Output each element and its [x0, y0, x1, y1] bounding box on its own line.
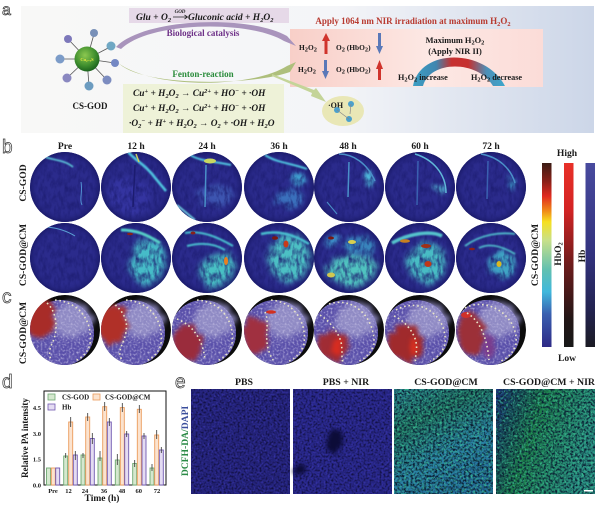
panel: H2O2 response box: [290, 29, 543, 87]
glucose formula box: 2: [259, 17, 264, 24]
Fenton equations box: 2: [217, 123, 222, 130]
Fenton equations box: −: [235, 103, 239, 110]
panel: H2O2 response box: 2: [365, 46, 368, 54]
image 24 h: [172, 223, 242, 293]
panel: H2O2 response box: ): [368, 43, 371, 52]
panel label d: d: [2, 372, 13, 393]
fluorescence headers: PBS + NIR: [323, 377, 370, 388]
panel: H2O2 response box: 2: [342, 46, 345, 54]
image Pre: [30, 152, 100, 222]
colour bars legend: [530, 148, 595, 364]
panel: H2O2 response box: 2: [477, 76, 481, 84]
image 12 h: [101, 152, 171, 222]
NIR heading: Apply 1064 nm NIR irradiation at maximum H: [315, 16, 497, 26]
panel: H2O2 response box: 2: [487, 76, 490, 84]
image 48 h: [312, 295, 384, 366]
panel: H2O2 response box: 2: [365, 68, 368, 76]
fluorescence headers: CS-GOD@CM: [414, 377, 478, 388]
panel: H2O2 response box: increase: [417, 73, 448, 82]
time headers: 24 h: [198, 141, 216, 152]
Fenton equations box: + HO: [211, 89, 235, 99]
image 36 h: [242, 295, 314, 366]
CS-GOD@CM bars: [51, 407, 159, 485]
error bars: [66, 402, 161, 471]
icon: hydroxyl radical: [322, 96, 364, 126]
Fenton equations box: O: [187, 119, 194, 129]
panel: H2O2 response box: 2: [404, 76, 408, 84]
Fenton equations box: 2: [174, 108, 179, 115]
y axis title: Relative PA intensity: [20, 398, 30, 478]
panel label a: a: [2, 2, 11, 19]
Fenton equations box: + H: [166, 119, 184, 129]
bar chart: relative PA intensity: 36: [101, 488, 108, 495]
image 36 h: [244, 223, 317, 293]
panel: H2O2 response box: O: [336, 65, 342, 74]
bar chart: relative PA intensity: 48: [119, 488, 126, 495]
panel: H2O2 response box: 2: [342, 68, 345, 76]
fluorescence headers: PBS: [235, 377, 254, 388]
image 24 h: [170, 295, 242, 366]
bar chart: relative PA intensity: 0.0: [33, 482, 41, 490]
panel: H2O2 response box: O: [475, 36, 482, 45]
colour bars legend: Low: [558, 353, 576, 364]
bar chart: relative PA intensity: 60: [135, 488, 142, 495]
Fenton equations box: + H: [148, 104, 166, 114]
image 72 h: [456, 223, 526, 293]
time headers: 48 h: [339, 141, 357, 152]
Fenton equations box: 2: [164, 108, 169, 115]
colour bars legend: HbO: [553, 245, 564, 266]
image 48 h: [314, 223, 384, 293]
panel: H2O2 response box: 2: [313, 68, 316, 76]
panel: H2O2 response box: H: [299, 43, 305, 52]
Fenton equations box: 2: [174, 93, 179, 100]
PA row 3: merged HbO2/Hb images: [26, 295, 526, 366]
image 72 h: [454, 295, 526, 366]
panel: H2O2 response box: O: [408, 73, 414, 82]
text Biological catalysis: Biological catalysis: [167, 28, 240, 38]
panel: H2O2 response box: O: [336, 43, 342, 52]
panel: H2O2 response box: H: [398, 73, 404, 82]
panel: H2O2 response box: (Apply NIR II): [428, 47, 482, 56]
colour bar Hb: [586, 163, 595, 347]
bar chart: relative PA intensity: 72: [154, 488, 160, 495]
Fenton equations box: [123, 84, 284, 133]
Fenton equations box: Cu: [133, 89, 144, 99]
image 12 h: [101, 223, 171, 293]
bar chart: relative PA intensity: 12: [65, 488, 72, 495]
row label CS-GOD: CS-GOD: [18, 164, 29, 202]
panel: H2O2 response box: O: [481, 73, 487, 82]
panel: H2O2 response box: O: [307, 65, 313, 74]
chart legend: CS-GOD@CM: [105, 394, 151, 402]
time headers: 12 h: [127, 141, 145, 152]
time headers: 60 h: [411, 141, 429, 152]
icon: hydroxyl radical: ·OH: [328, 101, 344, 110]
fluorescence image CS-GOD@CM: [394, 389, 493, 494]
glucose formula box: GOD: [175, 10, 186, 15]
PA row 1: CS-GOD images: [30, 152, 526, 222]
row label CS-GOD@CM: CS-GOD@CM: [18, 224, 29, 286]
panel: H2O2 response box: (HbO: [345, 65, 365, 74]
bar chart: relative PA intensity: 24: [82, 488, 89, 495]
glucose formula box: 2: [269, 17, 274, 24]
PA row 2: CS-GOD@CM images: [30, 223, 526, 293]
Hb bars: [56, 422, 163, 485]
Fenton equations box: O: [169, 89, 176, 99]
colour bars legend: CS-GOD@CM: [530, 224, 541, 286]
colour bar CS-GOD@CM: [542, 163, 552, 347]
NIR heading: O: [500, 16, 507, 26]
glucose formula box: Glu + O: [136, 13, 168, 23]
CS-GOD bars: [46, 455, 154, 485]
glucose formula box: 2: [167, 17, 172, 24]
colour bars legend: Hb: [577, 250, 588, 262]
chart legend: CS-GOD: [62, 394, 89, 402]
panel label c: c: [2, 287, 12, 308]
glucose formula box: O: [263, 13, 270, 23]
image Pre: [30, 223, 100, 293]
Fenton equations box: O: [268, 119, 275, 129]
Fenton equations box: → O: [197, 119, 218, 129]
time headers: 72 h: [482, 141, 500, 152]
arrow: biological catalysis arc: [116, 22, 296, 49]
panel: H2O2 response box: O: [308, 43, 314, 52]
label CS-GOD: CS-GOD: [72, 101, 108, 111]
panel: H2O2 response box: H: [471, 73, 477, 82]
time headers: Pre: [58, 141, 73, 152]
panel: H2O2 response box: 2: [414, 76, 417, 84]
Fenton equations box: +: [144, 88, 148, 95]
panel: H2O2 response box: 2: [471, 40, 475, 46]
row label c CS-GOD@CM: CS-GOD@CM: [18, 302, 29, 364]
panel: H2O2 response box: 2: [305, 46, 308, 54]
Fenton equations box: 2+: [203, 88, 211, 95]
colour bars legend: 2: [558, 242, 564, 245]
image 60 h: [385, 223, 455, 293]
Fenton equations box: +: [163, 118, 167, 125]
image 60 h: [383, 295, 455, 366]
x axis title: Time (h): [85, 493, 119, 504]
colour bar HbO2: [564, 163, 574, 347]
panel: H2O2 response box: Maximum H: [426, 36, 471, 45]
image 12 h: [97, 295, 171, 366]
panel: H2O2 response box: ): [368, 65, 371, 74]
Fenton equations box: + ·OH: [239, 104, 266, 114]
glucose formula box: Gluconic acid + H: [188, 13, 260, 23]
chart legend: Hb: [62, 404, 71, 412]
Fenton equations box: + H: [148, 89, 166, 99]
icon: CS-GOD nanoparticle: Cu₂₋ₓS: [80, 57, 94, 62]
row label DCFH-DA/DAPI: DCFH-DA/DAPI: [180, 406, 191, 476]
Fenton equations box: −: [235, 88, 239, 95]
glucose formula box: [129, 8, 289, 24]
Fenton equations box: 2: [164, 93, 169, 100]
Fenton equations box: ·O: [129, 119, 138, 129]
bar chart: relative PA intensity: 3.0: [33, 431, 41, 438]
panel: H2O2 response box: 2: [481, 40, 484, 46]
Fenton equations box: + ·OH + H: [221, 119, 265, 129]
fluorescence image CS-GOD@CM + NIR: [496, 389, 595, 494]
Fenton equations box: 2+: [203, 103, 211, 110]
Fenton equations box: + HO: [211, 104, 235, 114]
Fenton equations box: O: [169, 104, 176, 114]
bar chart: relative PA intensity: 1.5: [33, 456, 42, 464]
image Pre: [26, 295, 100, 366]
Fenton equations box: + ·OH: [239, 89, 266, 99]
bar chart: relative PA intensity: [20, 391, 166, 504]
Fenton equations box: Cu: [133, 104, 144, 114]
image 48 h: [314, 152, 384, 222]
Fenton equations box: 2: [264, 123, 269, 130]
Fenton equations box: → Cu: [179, 104, 204, 114]
time headers: 36 h: [270, 141, 288, 152]
panel: H2O2 response box: H: [298, 65, 304, 74]
Fenton equations box: 2: [192, 123, 198, 130]
image 72 h: [456, 152, 526, 222]
NIR heading: 2: [507, 21, 511, 28]
time headers: [58, 141, 500, 152]
panel label b: b: [2, 137, 13, 158]
panel label e: e: [175, 372, 186, 393]
image 60 h: [385, 152, 455, 222]
Fenton equations box: 2: [137, 123, 142, 130]
bar chart: relative PA intensity: 4.5: [33, 405, 42, 412]
image 36 h: [244, 152, 314, 222]
Fenton equations box: → Cu: [179, 89, 204, 99]
panel: H2O2 response box: 2: [304, 68, 307, 76]
panel: H2O2 response box: 2: [314, 46, 317, 54]
arrow: Fenton arc: [117, 62, 296, 83]
fluorescence headers: [235, 377, 596, 388]
chart legend: [48, 394, 151, 412]
panel a: reaction schematic: [2, 2, 594, 133]
bar chart: relative PA intensity: Pre: [48, 488, 58, 495]
icon: CS-GOD nanoparticle: [56, 29, 119, 90]
Fenton equations box: 2: [183, 123, 188, 130]
arrow: hydroxyl radical arrow: [272, 74, 326, 102]
fluorescence image PBS: [191, 389, 290, 494]
panel: H2O2 response box: (HbO: [345, 43, 365, 52]
image 24 h: [172, 152, 242, 222]
Fenton equations box: −: [141, 118, 145, 125]
Fenton equations box: + H: [145, 119, 163, 129]
text Fenton-reaction: Fenton-reaction: [172, 69, 234, 79]
colour bars legend: High: [557, 148, 578, 159]
Fenton equations box: +: [144, 103, 148, 110]
NIR heading: 2: [497, 21, 500, 28]
fluorescence headers: CS-GOD@CM + NIR: [503, 377, 596, 388]
panel: H2O2 response box: decrease: [490, 73, 522, 82]
fluorescence image PBS + NIR: [293, 389, 392, 494]
